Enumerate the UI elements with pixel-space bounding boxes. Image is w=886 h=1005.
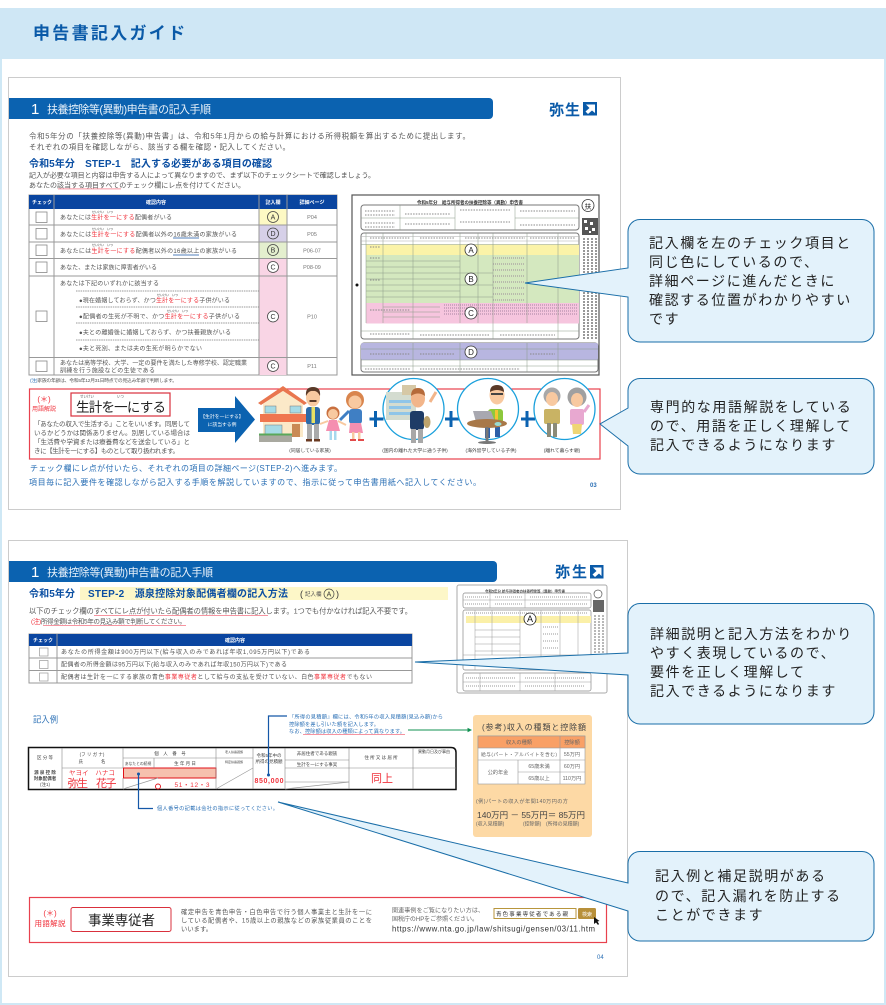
- logo: yayoi: 弥生: [555, 563, 587, 581]
- table header labels: チェック: [32, 199, 52, 206]
- requirements text: (注)所得金額は令和5年の見込み額で判断してください。: [31, 616, 186, 626]
- callout: detailed explanation: 記入できるようになります: [650, 683, 837, 699]
- reference table: 60万円: [564, 763, 580, 770]
- check boxes: [40, 648, 48, 681]
- table row text: あなた、または家族に障害者がいる: [60, 264, 157, 272]
- next step note: 項目毎に記入要件を確認しながら記入する手順を解説していますので、指示に従って申告書用紙へ記入してください。: [29, 477, 481, 487]
- glossary explanation: いるかどうかは関係ありません。別居している場合は: [34, 428, 190, 437]
- arrow: に該当する例: [208, 421, 237, 428]
- check boxes: [36, 212, 47, 372]
- checklist table: A: [271, 214, 276, 222]
- table row text: ●夫と死別、または夫の生死が明らかでない: [79, 344, 202, 352]
- section banner: [9, 98, 493, 119]
- entry example form: [28, 748, 456, 790]
- illustration captions: (離れて暮らす親): [544, 447, 581, 454]
- glossary label: [34, 909, 66, 928]
- form header labels: 氏 名: [78, 758, 106, 765]
- table row text: [60, 214, 247, 374]
- step-2 heading: A: [327, 592, 332, 598]
- reference table: 65歳未満: [528, 762, 550, 770]
- form thumbnail: A: [527, 614, 533, 624]
- entry example heading: 記入例: [33, 714, 58, 724]
- reference link: 国税庁のHPをご参照ください。: [392, 915, 478, 923]
- callout: entry example: 記入例と補足説明がある: [655, 868, 827, 884]
- illustration captions: (同居している家族): [289, 447, 331, 454]
- declaration form image: 扶: [585, 202, 592, 210]
- step-2 heading: 令和5年分: [29, 587, 75, 600]
- reference link: 関連事例をご覧になりたい方は、: [392, 906, 484, 914]
- panel: glossary: [30, 378, 600, 459]
- section banner: [9, 561, 497, 582]
- callout: entry example: ことができます: [655, 907, 764, 923]
- ruby annotations: せいけい いつ: [92, 209, 113, 214]
- callout: detailed explanation: 詳細説明と記入方法をわかり: [650, 626, 853, 642]
- glossary label: 用語解説: [32, 405, 56, 413]
- logo: yayoi: [555, 563, 604, 581]
- step-1 heading: 令和5年分 STEP-1 記入する必要がある項目の確認: [29, 157, 272, 170]
- step-2 heading: STEP-2 源泉控除対象配偶者欄の記入方法: [88, 587, 288, 600]
- checklist table: [29, 195, 337, 375]
- table row text: 訓練を行う施設などの生徒である: [60, 366, 155, 374]
- panel: income and deductions reference: [473, 715, 592, 837]
- glossary term: [71, 908, 171, 932]
- reference table: 給与(パート・アルバイトを含む): [481, 751, 557, 758]
- table header labels: 確認内容: [146, 199, 166, 206]
- ruby annotations: せいけい いつ: [92, 226, 113, 231]
- table header labels: [33, 637, 245, 644]
- arrow: [198, 396, 255, 443]
- arrow: to reference panel: [408, 728, 471, 732]
- illustration: child studying abroad: [458, 378, 518, 444]
- form header labels: 生計を一にする事実: [297, 761, 338, 768]
- glossary explanation: いいます。: [181, 925, 212, 933]
- table footnote: (注)家族の年齢は、令和5年12月31日時点での見込み年齢で判断します。: [30, 377, 177, 384]
- table header labels: 記入欄: [265, 199, 281, 206]
- form header labels: (フ リ ガ ナ): [80, 751, 105, 758]
- note: estimated income: [267, 712, 443, 776]
- table row text: [61, 648, 372, 681]
- intro text: それぞれの項目を確認しながら、該当する欄を確認・記入してください。: [29, 142, 290, 152]
- illustration: child at university: [383, 378, 444, 443]
- requirements text: 以下のチェック欄のすべてにレ点が付いたら配偶者の情報を申告書に記入します。1つでも付かなければ記入不要です。: [29, 606, 412, 616]
- table row text: あなたの所得金額は900万円以下(給与収入のみであれば年収1,095万円以下)である: [61, 648, 310, 656]
- reference example: (収入見積額): [476, 820, 505, 828]
- form header labels: 老人扶養親族: [225, 749, 243, 754]
- ruby annotations: せいけい いつ: [92, 242, 113, 247]
- detail page numbers: P11: [307, 364, 317, 370]
- illustration: parents living apart: [534, 378, 595, 440]
- table header labels: 確認内容: [225, 637, 245, 644]
- step-1 description: あなたの該当する項目すべてのチェック欄にレ点を付けてください。: [29, 180, 245, 190]
- next step note: チェック欄にレ点が付いたら、それぞれの項目の詳細ページ(STEP-2)へ進みます。: [30, 463, 342, 473]
- glossary term: せいけい: [80, 394, 94, 398]
- glossary term: いつ: [117, 394, 124, 398]
- detail page numbers: P08-09: [303, 265, 321, 271]
- reference table: 控除額: [564, 738, 581, 746]
- form header labels: [34, 748, 450, 788]
- step-2 heading: 記入欄: [305, 590, 322, 598]
- glossary term: [71, 393, 170, 416]
- reference table: [478, 736, 585, 784]
- reference link: https://www.nta.go.jp/law/shitsugi/gensen/03/11.htm: [392, 924, 595, 934]
- reference table: 65歳以上: [528, 774, 550, 782]
- callout: entry column colors: 確認する位置がわかりやすい: [649, 292, 852, 308]
- declaration form image: 令和5年分 給与所得者の扶養控除等（異動）申告書: [417, 199, 523, 206]
- person: father: [306, 387, 320, 442]
- arrow: 【生計を一にする】: [200, 413, 244, 420]
- detail page numbers: P06-07: [303, 248, 321, 254]
- icon: cursor: [594, 917, 600, 925]
- glossary explanation: [181, 907, 372, 933]
- table row text: ●配偶者の生死が不明で、かつ生計を一にする子供がいる: [79, 312, 240, 320]
- callout: glossary: 専門的な用語解説をしている: [650, 399, 852, 415]
- callout: glossary: ので、用語を正しく理解して: [650, 418, 852, 434]
- filled example values: [68, 769, 393, 790]
- glossary explanation: 確定申告を青色申告・白色申告で行う個人事業主と生計を一に: [181, 907, 372, 916]
- page number 03: 03: [590, 483, 597, 489]
- declaration form image: D: [468, 348, 474, 357]
- glossary label: (＊): [43, 909, 57, 918]
- table header labels: チェック: [33, 637, 53, 644]
- section banner: 扶養控除等(異動)申告書の記入手順: [47, 565, 213, 579]
- detail page numbers: P05: [307, 232, 317, 238]
- form thumbnail: [457, 585, 607, 693]
- form header labels: 特定扶養親族: [225, 759, 243, 764]
- title: 申告書記入ガイド: [33, 23, 187, 43]
- page number 04: 04: [597, 955, 604, 961]
- note: estimated income: なお、控除額は収入の種類によって異なります。: [289, 727, 405, 735]
- detail page numbers: P04: [307, 215, 317, 221]
- checklist table: [29, 634, 412, 683]
- QR code: [582, 218, 598, 235]
- ruby annotations: せいけい いつ: [167, 308, 188, 313]
- glossary explanation: [34, 419, 190, 455]
- table row text: あなたは下記のいずれかに該当する: [60, 280, 159, 288]
- reference table: 収入の種類: [506, 738, 533, 746]
- form header labels: 非居住者である親族: [297, 750, 338, 757]
- plus sign: [370, 411, 384, 427]
- form header labels: 異動月日及び事由: [418, 748, 450, 754]
- glossary explanation: している配偶者や、15歳以上の親族などの家族従業員のことを: [181, 916, 372, 924]
- filled example values: 同上: [371, 772, 393, 785]
- callout: detailed explanation: やすく表現しているので、: [650, 645, 836, 661]
- step-2 heading: ): [336, 589, 339, 599]
- detail page numbers: [303, 215, 321, 370]
- filled example values: 弥生 花子: [68, 776, 116, 790]
- checklist table: C: [270, 314, 276, 321]
- next step note: [29, 463, 481, 487]
- filled example values: ヤヨイ ハナコ: [69, 769, 115, 777]
- form thumbnail: 令和5年分 給与所得者の扶養控除等（異動）申告書: [485, 588, 565, 594]
- filled example values: 51・12・3: [174, 782, 210, 789]
- callout: entry column colors: です: [649, 311, 680, 327]
- declaration form image: B: [468, 275, 474, 284]
- form header labels: 源 泉 控 除: [34, 769, 56, 776]
- glossary label: 用語解説: [34, 918, 66, 928]
- page title banner: [0, 8, 886, 59]
- reference link: [392, 906, 596, 934]
- form header labels: 所得の見積額: [256, 758, 283, 765]
- note: individual number: 個人番号の記載は会社の指示に従ってください。: [157, 804, 278, 812]
- declaration form image: [352, 195, 599, 375]
- reference link: 青色事業専従者である親: [496, 910, 568, 918]
- callout: detailed explanation: [415, 604, 874, 724]
- panel: glossary: [30, 898, 606, 942]
- illustration captions: [289, 447, 581, 454]
- step-2 heading: (: [300, 589, 303, 599]
- reference table: 110万円: [563, 775, 581, 782]
- glossary explanation: 「あなたの収入で生活する」ことをいいます。同居して: [34, 419, 190, 428]
- section banner: 1: [31, 564, 39, 581]
- illustration captions: (国内の離れた大学に通う子供): [382, 447, 448, 454]
- table row text: 配偶者は生計を一にする家族の青色事業専従者として給与の支払を受けていない、白色事業専従者でもない: [61, 673, 372, 681]
- logo: yayoi: [549, 101, 597, 119]
- step-2 heading: [29, 587, 448, 600]
- callout: entry column colors: 記入欄を左のチェック項目と: [649, 235, 852, 251]
- table row text: あなたには生計を一にする配偶者以外の16歳以上の家族がいる: [60, 247, 237, 255]
- glossary explanation: きに【生計を一にする】ものとして取り扱われます。: [34, 446, 179, 455]
- form header labels: あなたとの続柄: [125, 761, 151, 766]
- reference table: 55万円: [564, 751, 580, 758]
- declaration form image: C: [468, 309, 474, 318]
- illustration: house and family: [258, 386, 364, 442]
- person: girl: [320, 406, 346, 440]
- reference example: 140万円 － 55万円＝ 85万円: [477, 810, 585, 820]
- table row text: あなたには生計を一にする配偶者がいる: [60, 214, 172, 222]
- form header labels: 区 分 等: [37, 754, 53, 761]
- checklist table: B: [271, 248, 276, 254]
- note: estimated income: 控除額を差し引いた額を記入します。: [289, 720, 379, 728]
- form header labels: 住 所 又 は 居 所: [364, 754, 398, 761]
- callout: entry column colors: [525, 220, 874, 342]
- table row text: ●夫との離婚後に婚姻しておらず、かつ扶養親族がいる: [79, 328, 231, 336]
- callout: entry example: [278, 802, 874, 941]
- callout: glossary: 記入できるようになります: [650, 437, 837, 453]
- note: individual number: [137, 772, 278, 812]
- detail page numbers: P10: [307, 314, 317, 320]
- glossary explanation: 「生活費や学資または療養費などを送金している」と: [34, 437, 190, 446]
- reference example: (例)パートの収入が年間140万円の方: [476, 797, 568, 805]
- requirements text: [29, 606, 412, 626]
- callout: entry example: ので、記入漏れを防止する: [655, 888, 842, 904]
- section banner: 1: [31, 101, 39, 118]
- step-1 description: [29, 170, 375, 190]
- glossary label: [32, 395, 56, 413]
- declaration form image: A: [468, 246, 474, 255]
- table row text: 配偶者の所得金額は95万円以下(給与収入のみであれば年収150万円以下)である: [61, 660, 287, 668]
- glossary term: 事業専従者: [88, 913, 155, 928]
- entry column markers: [268, 212, 278, 372]
- table header labels: [32, 199, 324, 206]
- panel: page 04 STEP-2: [8, 540, 628, 976]
- note: estimated income: 『所得の見積額』欄には、令和5年の収入見積額(見込み額)から: [289, 712, 443, 720]
- callout: entry column colors: 詳細ページに進んだときに: [649, 273, 836, 289]
- ruby annotations: せいけい いつ: [157, 292, 178, 297]
- callout: detailed explanation: 要件を正しく理解して: [650, 664, 806, 680]
- checklist table: C: [270, 364, 276, 370]
- reference example: (所得の見積額): [546, 820, 580, 828]
- form header labels: 対象配偶者: [34, 775, 57, 782]
- glossary term: 生計を一にする: [76, 400, 166, 415]
- checklist table: C: [270, 264, 276, 272]
- filled example values: 850,000: [254, 778, 284, 785]
- table row text: あなたは高等学校、大学、一定の要件を満たした専修学校、認定職業: [60, 359, 247, 367]
- table header labels: 詳細ページ: [300, 199, 324, 206]
- reference example: (控除額): [523, 820, 542, 828]
- checklist table: D: [270, 231, 276, 238]
- step-1 description: 記入が必要な項目と内容は申告する人によって異なりますので、まず以下のチェックシートで確認しましょう。: [29, 170, 375, 180]
- plus sign: [445, 411, 459, 427]
- callout: glossary: [600, 378, 874, 474]
- section banner: 扶養控除等(異動)申告書の記入手順: [47, 102, 211, 116]
- table row text: あなたには生計を一にする配偶者以外の16歳未満の家族がいる: [60, 230, 237, 238]
- illustration captions: (海外留学している子供): [465, 447, 517, 454]
- intro text: [29, 130, 470, 152]
- logo: yayoi: 弥生: [549, 101, 580, 119]
- section markers: [465, 200, 594, 358]
- reference table: 公的年金: [488, 768, 509, 776]
- person: mother: [340, 391, 364, 441]
- ruby annotations: [92, 209, 188, 313]
- reference title: (参考)収入の種類と控除額: [482, 722, 586, 732]
- form header labels: (注1): [40, 781, 51, 788]
- intro text: 令和5年分の「扶養控除等(異動)申告書」は、令和5年1月からの給与計算における所得税額を算出するために提出します。: [29, 130, 470, 140]
- reference example: [476, 797, 585, 828]
- plus sign: [521, 411, 535, 427]
- callout: entry column colors: 同じ色にしているので、: [649, 254, 820, 270]
- form header labels: 生 年 月 日: [174, 760, 196, 767]
- reference link: 検索: [582, 911, 592, 918]
- form header labels: 令和5年中の: [256, 752, 282, 759]
- form header labels: 個 人 番 号: [154, 750, 186, 757]
- glossary label: (＊): [37, 395, 51, 404]
- table row text: ●現在婚姻しておらず、かつ生計を一にする子供がいる: [79, 296, 230, 304]
- panel: page 03 STEP-1: [8, 78, 620, 510]
